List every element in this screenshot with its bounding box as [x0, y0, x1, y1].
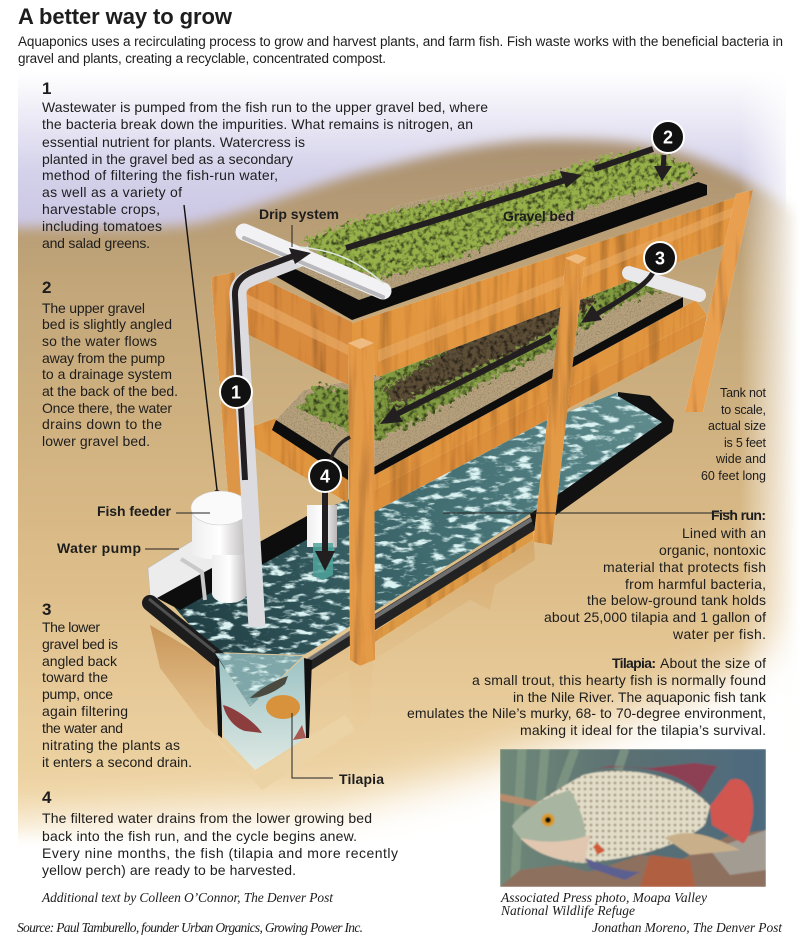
- lower gravel bed: [248, 270, 707, 512]
- step 3 text: the water and: [42, 720, 123, 736]
- arrow 3: water flow across lower bed: [380, 272, 653, 424]
- step 1 text: the bacteria break down the impurities. What remains is nitrogen, an: [42, 116, 473, 132]
- fish run callout: about 25,000 tilapia and 1 gallon of: [544, 609, 766, 625]
- label: drip system: Drip system: [259, 206, 339, 222]
- step 1 text: planted in the gravel bed as a secondary: [42, 151, 293, 167]
- step 3 text: pump, once: [42, 686, 113, 702]
- step 4 text: back into the fish run, and the cycle begins anew.: [42, 828, 357, 844]
- photo caption: [500, 890, 707, 918]
- feeder hanging line: [184, 205, 217, 490]
- photo: tilapia fish: [500, 749, 766, 887]
- step 3 text: angled back: [42, 653, 118, 669]
- tank scale note: wide and: [715, 452, 766, 466]
- step 3 text: again filtering: [42, 703, 128, 719]
- artist credit: Jonathan Moreno, The Denver Post: [592, 920, 783, 935]
- fish run callout: [443, 507, 766, 642]
- label: water pump: [57, 540, 179, 556]
- label: gravel bed: Gravel bed: [503, 208, 574, 224]
- label: fish feeder: [97, 503, 210, 519]
- arrow 1: water rising through pump pipe: [235, 248, 311, 480]
- number marker 4: 4: [320, 466, 330, 486]
- step 4 text: [42, 788, 398, 878]
- tilapia callout: [407, 655, 767, 738]
- fish run water surface: [170, 392, 668, 655]
- step 3 text: 3: [42, 600, 51, 619]
- label: tilapia: [292, 713, 384, 787]
- step 4 text: yellow perch) are ready to be harvested.: [42, 862, 296, 878]
- source line: Source: Paul Tamburello, founder Urban Organics, Growing Power Inc.: [17, 920, 363, 935]
- label: tilapia: Tilapia: [339, 771, 384, 787]
- label: water pump: Water pump: [57, 540, 141, 556]
- step 2 text: so the water flows: [42, 333, 157, 349]
- step 1 text: Wastewater is pumped from the fish run to the upper gravel bed, where: [42, 99, 488, 115]
- title: A better way to grow: [18, 4, 233, 29]
- water pump housing: [148, 540, 215, 600]
- tilapia callout: Tilapia:: [612, 655, 656, 671]
- tilapia callout: making it ideal for the tilapia’s survival.: [520, 722, 766, 738]
- tank scale note: is 5 feet: [724, 436, 767, 450]
- underground tank walls: [150, 528, 535, 790]
- illustration: aquaponics system: [148, 121, 753, 790]
- intro text: Aquaponics uses a recirculating process to grow and harvest plants, and farm fish. Fish waste works with the beneficial bacteria in: [18, 34, 783, 49]
- step 2 text: lower gravel bed.: [42, 433, 150, 449]
- step 1 text: essential nutrient for plants. Watercress is: [42, 134, 305, 150]
- step 2 text: bed is slightly angled: [42, 316, 172, 332]
- step 2 text: [42, 278, 178, 449]
- tilapia callout: in the Nile River. The aquaponic fish tank: [513, 689, 767, 705]
- fish run callout: from harmful bacteria,: [625, 576, 766, 592]
- step 4 text: 4: [42, 788, 52, 807]
- step 2 text: drains down to the: [42, 416, 162, 432]
- tilapia fish in cutaway: [223, 676, 306, 740]
- step 1 text: as well as a variety of: [42, 184, 182, 200]
- arrow 2: water flow across upper bed: [346, 149, 672, 248]
- fish run rim: [149, 392, 674, 672]
- lower drain pipe and glass: [307, 505, 337, 580]
- step 3 text: The lower: [42, 619, 100, 635]
- step 3 text: gravel bed is: [42, 636, 118, 652]
- step 2 text: away from the pump: [42, 350, 165, 366]
- number marker 1: 1: [231, 382, 241, 402]
- label: drip system: [259, 206, 339, 247]
- number marker 3: 3: [655, 248, 665, 268]
- upper gravel bed: [239, 150, 736, 385]
- step 3 text: nitrating the plants as: [42, 737, 180, 753]
- pump pipe: [238, 254, 311, 627]
- tank scale note: actual size: [708, 419, 766, 433]
- step 1 text: harvestable crops,: [42, 201, 160, 217]
- additional text credit: Additional text by Colleen O’Connor, The Denver Post: [41, 890, 334, 905]
- tilapia callout: emulates the Nile’s murky, 68- to 70-degree environment,: [407, 705, 766, 721]
- arrow 4: water draining back into tank: [315, 437, 350, 571]
- number marker 4: [309, 460, 341, 492]
- photo caption: Associated Press photo, Moapa Valley: [500, 890, 707, 905]
- drip pipes: [244, 232, 699, 297]
- number marker 2: 2: [663, 128, 673, 148]
- step 3 text: it enters a second drain.: [42, 754, 192, 770]
- tank scale note: to scale,: [721, 403, 766, 417]
- step 1 text: [42, 79, 488, 251]
- step 1 text: 1: [42, 79, 51, 98]
- label: fish feeder: Fish feeder: [97, 503, 172, 519]
- step 4 text: The filtered water drains from the lower growing bed: [42, 810, 372, 826]
- photo caption: National Wildlife Refuge: [500, 903, 635, 918]
- step 2 text: 2: [42, 278, 51, 297]
- step 1 text: including tomatoes: [42, 218, 162, 234]
- wooden frame posts: [211, 190, 753, 666]
- fish run callout: material that protects fish: [603, 559, 766, 575]
- tilapia callout: a small trout, this hearty fish is normally found: [472, 672, 766, 688]
- step 2 text: at the back of the bed.: [42, 383, 178, 399]
- step 4 text: Every nine months, the fish (tilapia and more recently: [42, 845, 398, 861]
- step 2 text: The upper gravel: [42, 300, 145, 316]
- cutaway view of tank with tilapia: [215, 653, 312, 770]
- number marker 2: [652, 121, 684, 153]
- tank scale note: Tank not: [720, 386, 767, 400]
- tank scale note: [701, 386, 767, 483]
- tank scale note: 60 feet long: [701, 469, 766, 483]
- step 2 text: to a drainage system: [42, 366, 172, 382]
- fish run callout: water per fish.: [672, 626, 766, 642]
- number marker 1: [220, 376, 252, 408]
- tilapia callout: About the size of: [660, 655, 766, 671]
- intro text: gravel and plants, creating a recyclable, concentrated compost.: [18, 51, 386, 66]
- number marker 3: [644, 242, 676, 274]
- fish run callout: organic, nontoxic: [659, 542, 766, 558]
- step 3 text: [42, 600, 192, 770]
- fish run callout: the below-ground tank holds: [587, 592, 766, 608]
- step 3 text: toward the: [42, 669, 108, 685]
- fish run callout: Lined with an: [682, 525, 766, 541]
- intro text: [18, 34, 783, 66]
- step 2 text: Once there, the water: [42, 400, 172, 416]
- step 1 text: and salad greens.: [42, 235, 150, 251]
- fish run callout: Fish run:: [711, 507, 766, 523]
- fish feeder: [181, 205, 249, 603]
- step 1 text: method of filtering the fish-run water,: [42, 167, 278, 183]
